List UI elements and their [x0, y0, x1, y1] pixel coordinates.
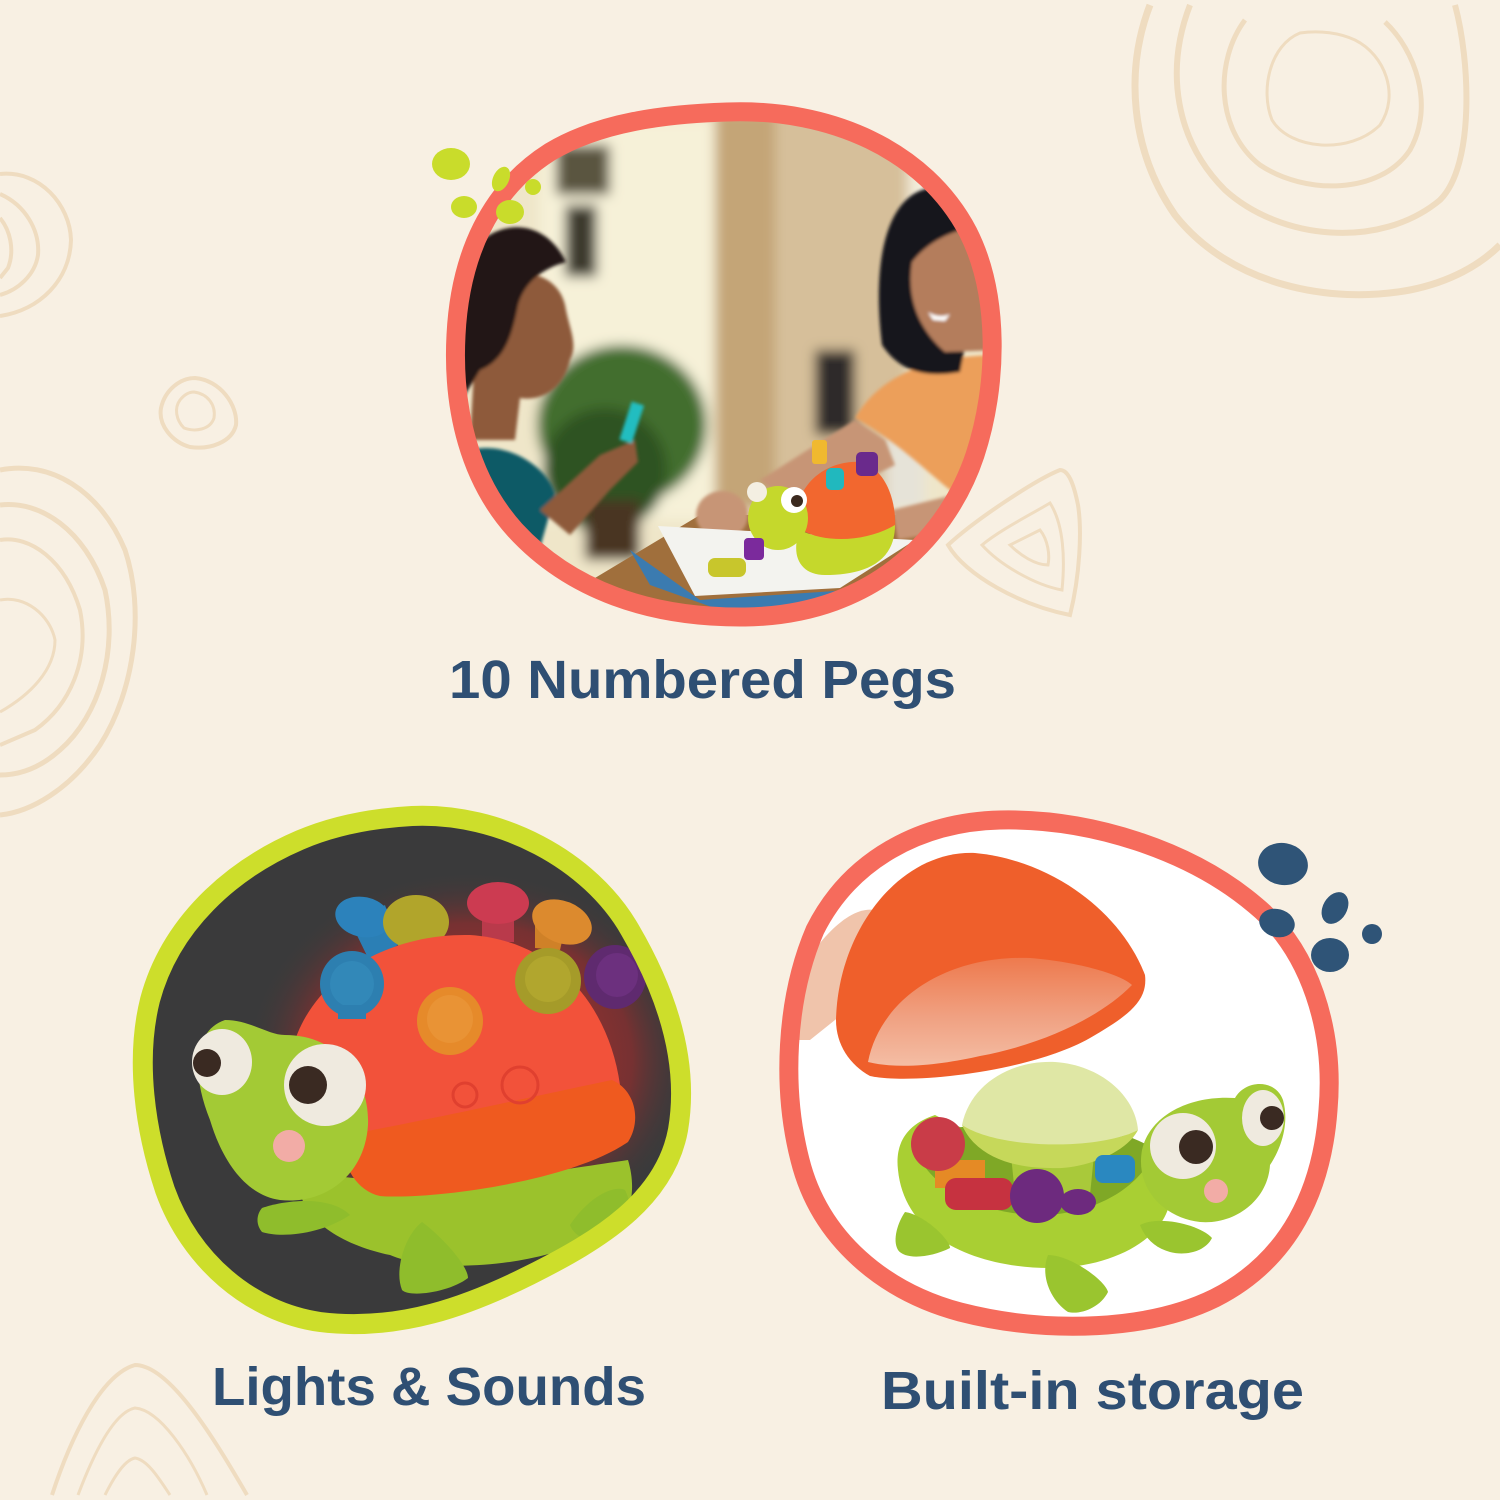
head — [1141, 1084, 1285, 1222]
toy — [708, 440, 895, 577]
woman — [696, 188, 1000, 540]
dome — [962, 1062, 1138, 1195]
table — [595, 515, 918, 606]
decorative rings: triangle right of photo — [948, 470, 1080, 615]
photo frame — [143, 816, 681, 1324]
back pegs — [331, 882, 599, 962]
panel: built-in storage photo — [780, 810, 1382, 1340]
front pegs — [320, 945, 646, 1055]
papers — [630, 526, 915, 610]
boy — [464, 224, 646, 544]
head — [192, 1020, 368, 1201]
legs and body — [258, 1160, 632, 1294]
icon: blue dots — [1255, 839, 1382, 972]
turtle base — [896, 1115, 1212, 1313]
decorative rings: bottom left — [52, 1365, 247, 1495]
hand — [799, 910, 872, 1040]
stored pegs — [911, 1117, 1135, 1223]
shell — [292, 935, 635, 1197]
heading: 10 Numbered Pegs: 10 Numbered Pegs — [449, 650, 956, 710]
decorative rings: small left — [161, 378, 236, 448]
shell lid — [836, 853, 1145, 1079]
panel: lights and sounds photo — [130, 800, 700, 1340]
photo frame — [789, 820, 1329, 1326]
icon: green dots — [432, 148, 541, 224]
heading: Lights & Sounds: Lights & Sounds — [212, 1357, 646, 1417]
blurred room background — [467, 121, 982, 578]
photo frame — [455, 112, 992, 617]
decorative rings: left top — [0, 174, 71, 316]
decorative rings: left large — [0, 468, 135, 815]
photo scene: boy, woman and toy — [464, 121, 983, 608]
open toy on white background — [798, 830, 1320, 1317]
panel: 10 numbered pegs photo — [432, 100, 1010, 630]
toy on dark background — [152, 826, 672, 1314]
decorative rings: top right — [1135, 5, 1500, 295]
heading: Built-in storage: Built-in storage — [881, 1361, 1304, 1421]
